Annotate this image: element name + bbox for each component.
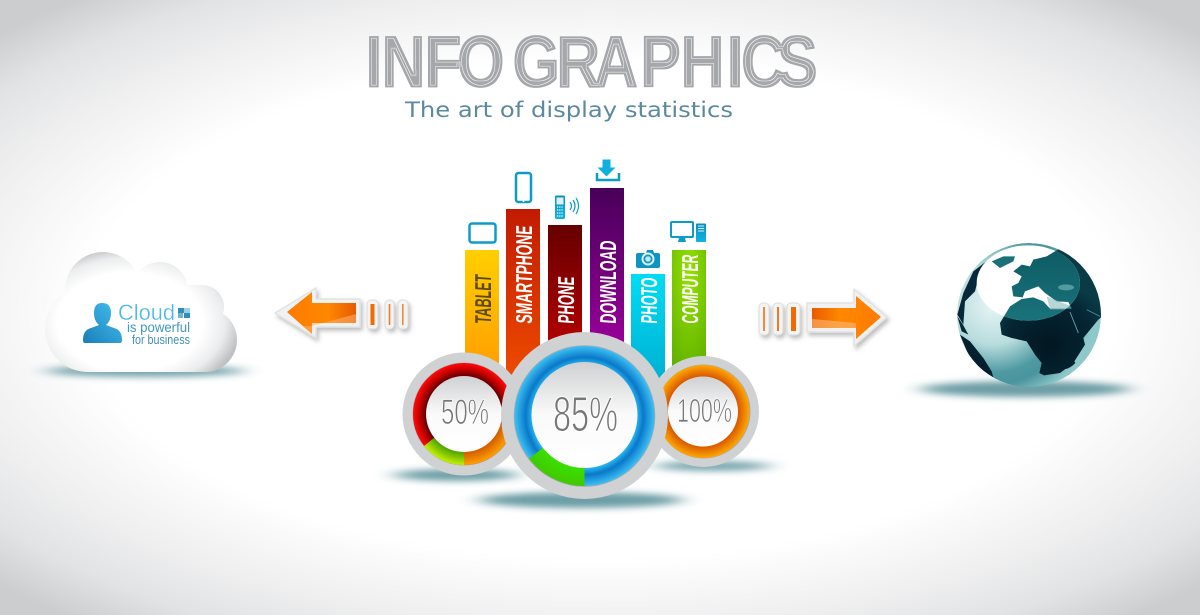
cloud logo text: is powerful [127,319,190,335]
bar: smartphone [506,209,540,389]
dial: 85%: 85% [553,388,618,442]
dial: 100%: 100% [677,392,732,429]
dial: 50%: 50% [441,393,489,432]
dial: 50% [402,352,526,476]
icon: download [597,160,619,180]
globe [957,243,1107,387]
bar: download: DOWNLOAD [595,240,621,324]
bar chart: device categories [465,188,706,400]
bar: computer: COMPUTER [677,253,703,324]
shadow: cloud [45,365,245,377]
bar: computer [672,250,706,370]
arrow: right [759,289,887,346]
subtitle: The art of display statistics [404,98,733,122]
globe: North America [957,260,987,324]
icon: logo squares [178,308,190,318]
arrow pills: right [759,303,800,335]
icon: tablet [470,224,496,242]
bar: download [590,188,624,348]
shadow: 50% dial [394,469,518,481]
bar: smartphone: SMARTPHONE [511,225,537,324]
cloud [45,252,237,372]
icon: computer [671,222,706,242]
shadow: 100% dial [655,461,771,471]
cloud logo text [118,300,190,347]
bar: tablet [465,250,499,380]
bar: phone [548,225,582,355]
bar: photo: PHOTO [636,277,662,324]
icon: smartphone [516,173,531,202]
shadow: globe [920,381,1130,397]
globe: ocean sphere [957,243,1101,387]
dial: 100% [648,356,759,467]
globe: Mediterranean shading [1047,296,1072,310]
globe: South America [960,335,993,377]
cloud logo text: Cloud [118,300,175,325]
icon: camera [636,250,660,268]
arrow pills: left [367,300,408,329]
arrow: left [275,288,408,338]
globe: Red Sea [1070,312,1078,333]
icon: person [83,303,122,343]
globe: Central America [957,316,968,335]
globe: Greenland [992,256,1015,268]
dial: 85% [501,332,668,499]
globe: Caspian and Black Sea [1058,284,1074,290]
globe: highlight [977,245,1080,321]
icon: phone with signal [555,196,578,219]
bar: tablet: TABLET [470,274,496,324]
globe: Persian Gulf [1087,310,1100,316]
bar: photo [631,274,665,400]
globe: land under highlight [992,251,1080,321]
cloud logo text: for business [132,332,190,347]
shadow: 85% dial [479,492,683,508]
globe: Madagascar [1066,362,1076,369]
title: INFOGRAPHICS [365,22,818,103]
bar: phone: PHONE [553,276,579,324]
globe: land, dark [1000,246,1107,375]
